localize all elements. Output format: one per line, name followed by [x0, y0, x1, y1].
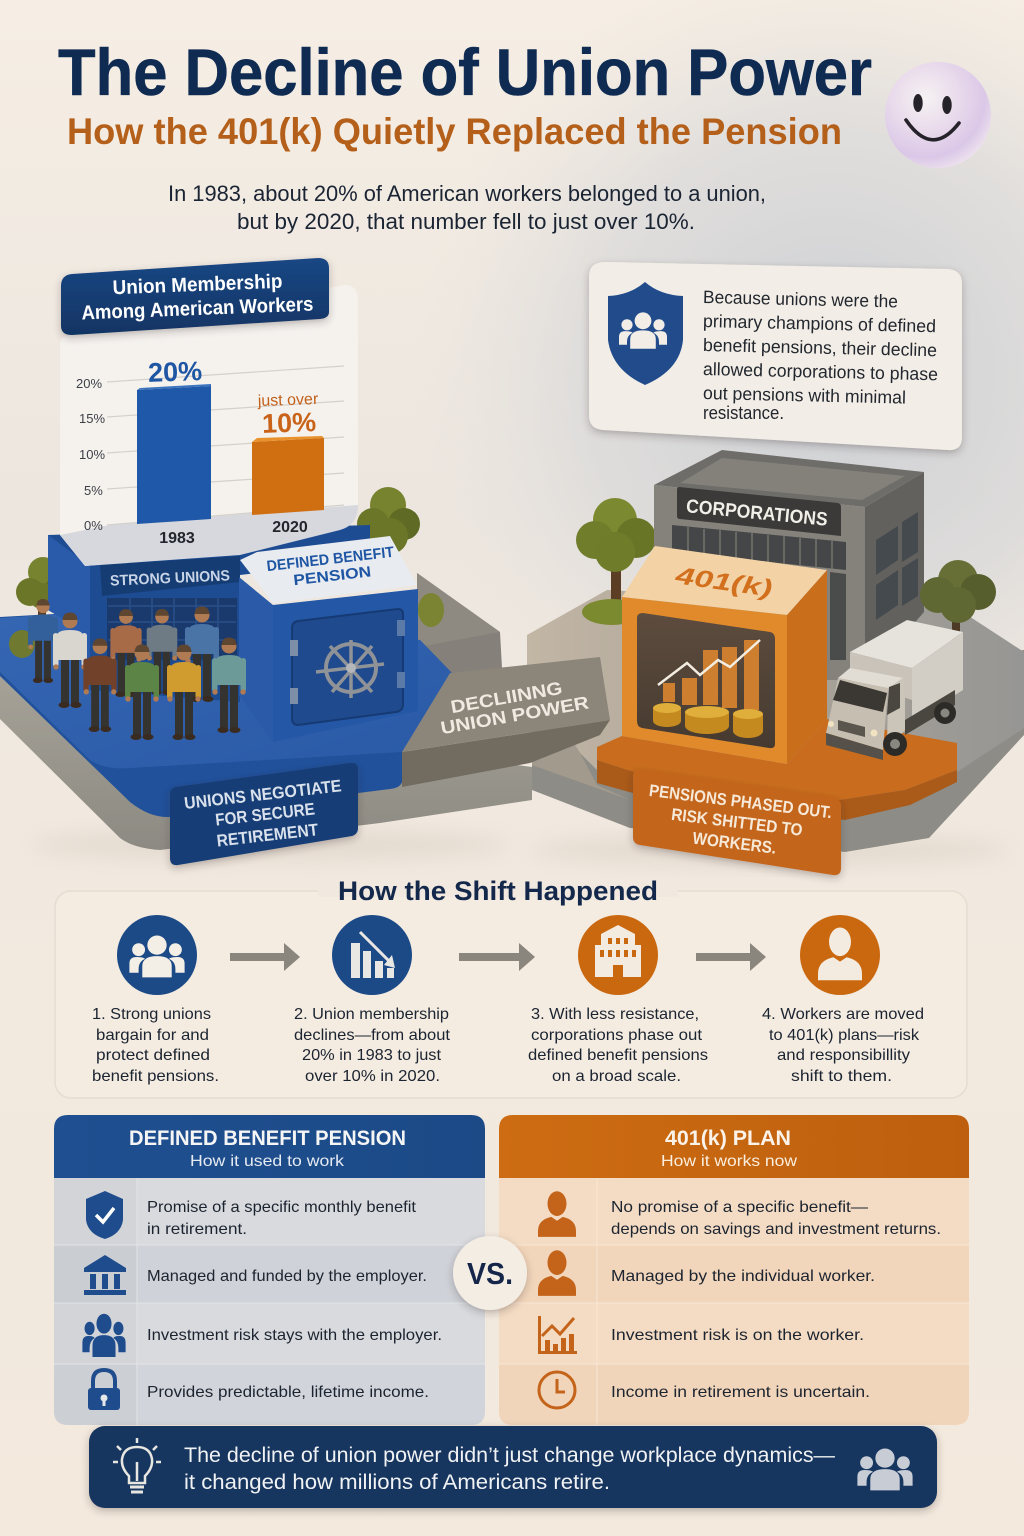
row text: Promise of a specific monthly benefit	[147, 1199, 417, 1216]
panel: union membership chart	[60, 285, 358, 566]
callout text: benefit pensions, their decline	[703, 335, 937, 360]
icon: lightbulb	[113, 1438, 161, 1492]
worker	[28, 599, 58, 683]
row 2	[538, 1250, 875, 1296]
intro text: In 1983, about 20% of American workers belonged to a union,	[168, 181, 766, 206]
row 2: Managed and funded by the employer.	[147, 1268, 427, 1285]
callout: pensions phased out: WORKERS.	[692, 829, 777, 858]
step text: 1. Strong unions	[92, 1006, 211, 1023]
step text: on a broad scale.	[552, 1068, 681, 1085]
chart gridlines and axis	[107, 366, 344, 525]
icon: office building	[578, 915, 658, 995]
icon: people	[857, 1448, 913, 1490]
row 2	[84, 1255, 427, 1295]
panel: how the shift happened	[55, 876, 967, 1098]
row 2: Managed by the individual worker.	[611, 1268, 875, 1285]
bar: 1983: 1983	[159, 530, 195, 547]
row text: No promise of a specific benefit—	[611, 1199, 868, 1216]
panel: union membership chart: 15%	[79, 411, 105, 426]
bar: 1983	[137, 356, 211, 547]
safe roof label: DEFINED BENEFIT	[266, 544, 395, 575]
callout: pensions phased out: PENSIONS PHASED OUT.	[648, 781, 833, 822]
tree: right	[920, 560, 996, 640]
worker	[212, 638, 246, 733]
row 1	[86, 1191, 417, 1239]
safe roof label	[240, 536, 417, 603]
step text: shift to them.	[791, 1068, 892, 1085]
arrow	[459, 943, 535, 971]
row 3	[82, 1314, 442, 1357]
callout text: out pensions with minimal	[703, 383, 906, 408]
step text: declines—from about	[294, 1027, 451, 1044]
panel: defined benefit pension	[54, 1115, 485, 1425]
row 3	[538, 1316, 864, 1354]
soft floor shadows	[30, 829, 1010, 866]
header	[54, 1115, 485, 1178]
sign: strong unions	[100, 556, 240, 596]
step text: to 401(k) plans—risk	[769, 1027, 920, 1044]
sign: corporations	[677, 487, 841, 536]
safe door	[292, 609, 403, 725]
panel: union membership chart: 5%	[84, 483, 103, 498]
step 4	[762, 915, 924, 1085]
icon: line chart	[538, 1316, 577, 1354]
worker	[185, 606, 219, 702]
bar: 2020: 2020	[272, 519, 308, 536]
arrow	[230, 943, 300, 971]
row text: depends on savings and investment returns.	[611, 1221, 941, 1238]
callout text	[703, 287, 938, 423]
step text: corporations phase out	[531, 1027, 703, 1044]
icon: shield check	[86, 1191, 123, 1239]
chart heading: Union Membership	[112, 271, 283, 299]
callout text: allowed corporations to phase	[703, 359, 938, 384]
icon: union shield	[608, 282, 683, 385]
workers group	[28, 599, 246, 740]
callout: pensions phased out	[633, 770, 841, 875]
vs badge	[453, 1236, 527, 1310]
arrow block: declining union power: UNION POWER	[439, 692, 590, 738]
icon: lock	[88, 1370, 120, 1410]
panel: union membership chart: 10%	[79, 447, 105, 462]
callout text: primary champions of defined	[703, 311, 936, 336]
callout: unions negotiate: FOR SECURE	[214, 799, 316, 830]
orange floor	[597, 719, 957, 820]
step text: benefit pensions.	[92, 1068, 219, 1085]
row 4	[539, 1372, 870, 1408]
step 1	[92, 915, 219, 1085]
icon: people	[82, 1314, 126, 1357]
left platform	[0, 573, 532, 850]
icon: smiley bubble	[885, 62, 991, 168]
heading: How the Shift Happened	[338, 876, 658, 906]
arrow	[696, 943, 766, 971]
worker	[125, 644, 159, 740]
step text: defined benefit pensions	[528, 1047, 708, 1064]
arrow block: declining union power	[402, 657, 610, 787]
arrow block: declining union power: DECLIINNG	[449, 678, 564, 717]
bar: 2020	[252, 391, 324, 536]
banner text	[184, 1444, 835, 1494]
icon: clock	[539, 1372, 575, 1408]
step text: 2. Union membership	[294, 1006, 449, 1023]
worker	[110, 609, 142, 697]
step text	[528, 1006, 708, 1085]
step text: 4. Workers are moved	[762, 1006, 924, 1023]
box roof label: 401(k)	[673, 562, 774, 603]
icon: falling bars	[332, 915, 412, 995]
step 3	[528, 915, 708, 1085]
step 2	[294, 915, 451, 1085]
bar: 1983: 20%	[148, 356, 203, 388]
icon: person	[800, 915, 880, 995]
callout text: resistance.	[703, 403, 784, 423]
row 1	[538, 1191, 941, 1238]
worker	[83, 638, 117, 732]
callout: pensions phased out: RISK SHITTED TO	[670, 805, 804, 840]
bar: 2020: 10%	[262, 407, 317, 439]
title: The Decline of Union Power	[58, 35, 872, 109]
box roof label	[622, 546, 827, 615]
step text	[92, 1006, 219, 1085]
callout text: Because unions were the	[703, 287, 898, 311]
building: strong unions	[48, 525, 370, 702]
header: How it works now	[661, 1153, 797, 1170]
safe: defined benefit pension	[239, 536, 418, 742]
safe wheel	[316, 640, 384, 698]
row 3: Investment risk stays with the employer.	[147, 1327, 442, 1344]
icon: bank	[84, 1255, 126, 1295]
bottom banner	[89, 1426, 937, 1508]
header: DEFINED BENEFIT PENSION	[129, 1127, 406, 1150]
banner text: The decline of union power didn’t just change workplace dynamics—	[184, 1444, 835, 1467]
tree: behind safe	[357, 487, 444, 627]
tree: right of platform left	[576, 498, 656, 625]
header: How it used to work	[190, 1153, 345, 1170]
coin stacks	[653, 708, 763, 738]
worker	[53, 612, 87, 708]
icon: person	[538, 1250, 576, 1296]
building: corporations	[654, 450, 924, 680]
worker	[147, 609, 177, 695]
step text: protect defined	[96, 1047, 210, 1064]
callout: because unions	[589, 262, 962, 450]
row 4	[88, 1370, 429, 1410]
subtitle: How the 401(k) Quietly Replaced the Pension	[67, 111, 842, 152]
panel: union membership chart: 0%	[84, 518, 103, 533]
row 4: Provides predictable, lifetime income.	[147, 1384, 429, 1401]
callout: unions negotiate	[170, 763, 358, 865]
step text	[762, 1006, 924, 1085]
row text	[147, 1199, 417, 1238]
chart heading	[61, 258, 329, 335]
step text: and responsibillity	[777, 1047, 910, 1064]
panel: 401(k) plan	[499, 1115, 969, 1425]
sign: strong unions: STRONG UNIONS	[110, 567, 230, 590]
safe roof label: PENSION	[293, 563, 372, 589]
callout: unions negotiate: RETIREMENT	[216, 820, 320, 851]
row text	[611, 1199, 941, 1238]
step text: 20% in 1983 to just	[302, 1047, 442, 1064]
row 3: Investment risk is on the worker.	[611, 1327, 864, 1344]
right platform	[527, 590, 1024, 852]
sign: corporations: CORPORATIONS	[685, 496, 829, 531]
slab behind	[417, 573, 502, 690]
callout: unions negotiate: UNIONS NEGOTIATE	[183, 776, 342, 813]
chart heading: Among American Workers	[81, 294, 314, 324]
truck	[826, 620, 963, 760]
banner text: it changed how millions of Americans retire.	[184, 1471, 610, 1494]
icon: person	[538, 1191, 576, 1237]
step text: bargain for and	[96, 1027, 209, 1044]
icon: group	[117, 915, 197, 995]
bar: 2020: just over	[257, 391, 319, 410]
box window with chart	[637, 613, 775, 748]
step text: over 10% in 2020.	[305, 1068, 440, 1085]
row text: in retirement.	[147, 1221, 247, 1238]
panel: union membership chart: 20%	[76, 376, 102, 391]
vs badge: VS.	[467, 1256, 513, 1291]
worker	[167, 644, 201, 740]
intro text	[168, 181, 766, 234]
header: 401(k) PLAN	[665, 1127, 791, 1150]
intro text: but by 2020, that number fell to just over 10%.	[237, 209, 695, 234]
step text	[294, 1006, 451, 1085]
header	[499, 1115, 969, 1178]
row 4: Income in retirement is uncertain.	[611, 1384, 870, 1401]
step text: 3. With less resistance,	[531, 1006, 699, 1023]
tree: back left	[9, 557, 68, 658]
box: 401(k)	[622, 546, 827, 764]
